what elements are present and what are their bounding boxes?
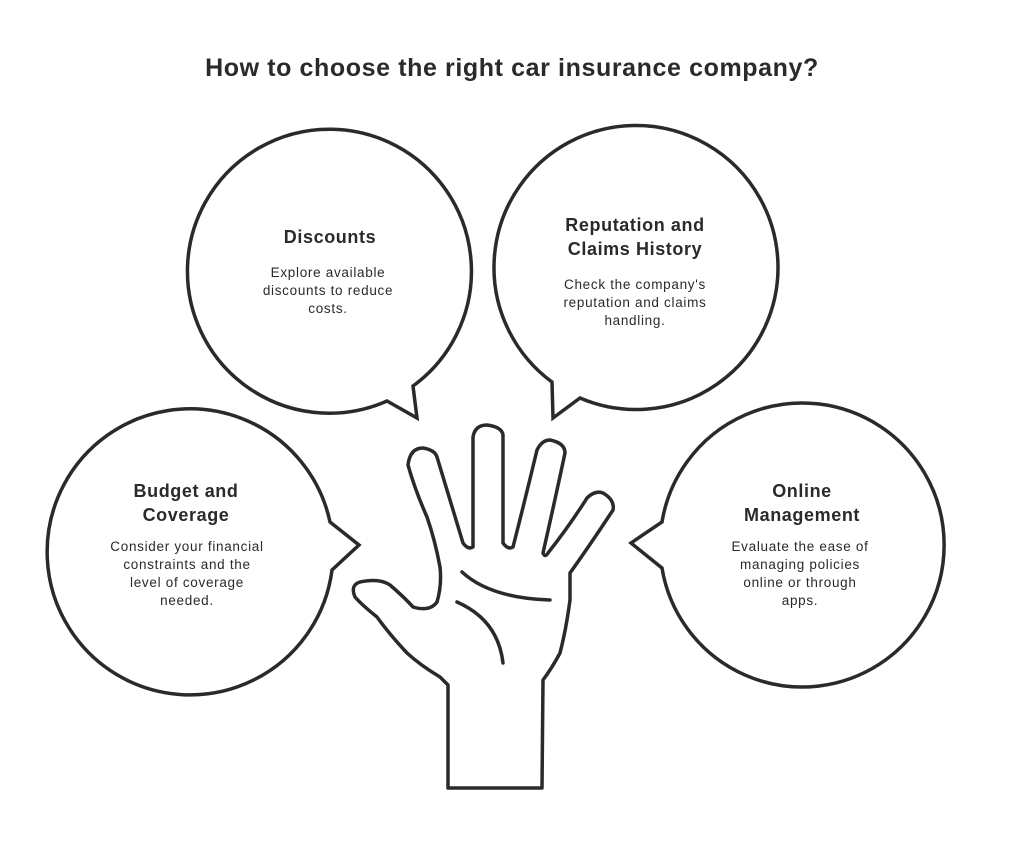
heading: online: Management: [744, 505, 860, 525]
title: How to choose the right car insurance company?: [205, 54, 819, 82]
text: online: managing policies: [740, 557, 860, 572]
text: discounts: Explore available: [271, 265, 385, 280]
text: online: online or through: [743, 575, 857, 590]
heading: reputation: Reputation and: [565, 215, 705, 235]
bubble: discounts: [187, 129, 471, 418]
text: budget: Consider your financial: [110, 539, 264, 554]
text: reputation: handling.: [604, 313, 666, 328]
bubble: online: [631, 403, 944, 687]
heading: budget: Coverage: [143, 505, 229, 525]
heading: discounts: Discounts: [284, 227, 376, 247]
text: discounts: discounts to reduce: [263, 283, 393, 298]
bubble: reputation: [494, 126, 778, 418]
text: online: apps.: [782, 593, 818, 608]
icon: hand: [353, 425, 613, 788]
text: budget: needed.: [160, 593, 214, 608]
text: reputation: reputation and claims: [563, 295, 707, 310]
heading: reputation: Claims History: [568, 239, 702, 259]
bubble: budget: [47, 409, 359, 695]
heading: budget: Budget and: [134, 481, 238, 501]
text: budget: constraints and the: [123, 557, 251, 572]
text: budget: level of coverage: [130, 575, 244, 590]
text: discounts: costs.: [308, 301, 348, 316]
heading: online: Online: [772, 481, 832, 501]
palm lines: [462, 572, 550, 600]
text: online: Evaluate the ease of: [731, 539, 869, 554]
text: reputation: Check the company's: [564, 277, 706, 292]
